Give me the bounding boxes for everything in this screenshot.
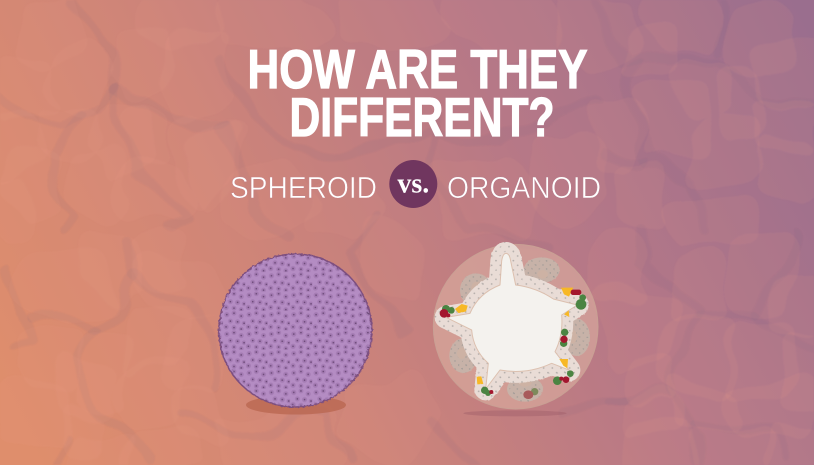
subtitle: organoid: ORGANOID: [447, 170, 601, 205]
badge: vs.: vs.: [397, 168, 429, 200]
spheroid shadow: [246, 396, 346, 414]
organoid crypts: [449, 257, 590, 402]
organoid shadow: [463, 410, 567, 416]
organoid illustration: [433, 244, 598, 416]
title: HOW ARE THEY: [248, 38, 588, 100]
subtitle: spheroid: SPHEROID: [230, 170, 377, 205]
yellow cells: [455, 288, 573, 384]
green cells: [442, 294, 586, 396]
spheroid rim: [219, 254, 372, 407]
crypt budding cells: [523, 388, 538, 399]
title: [248, 38, 588, 148]
epithelium: [446, 253, 577, 389]
red cells: [440, 290, 581, 394]
title: DIFFERENT?: [290, 86, 554, 148]
crypt centres: [457, 270, 577, 387]
organoid outer matrix: [433, 244, 598, 409]
spheroid illustration: [219, 254, 372, 414]
badge: vs.: [389, 160, 437, 208]
spheroid body: [222, 257, 369, 404]
lumen: [446, 253, 577, 389]
